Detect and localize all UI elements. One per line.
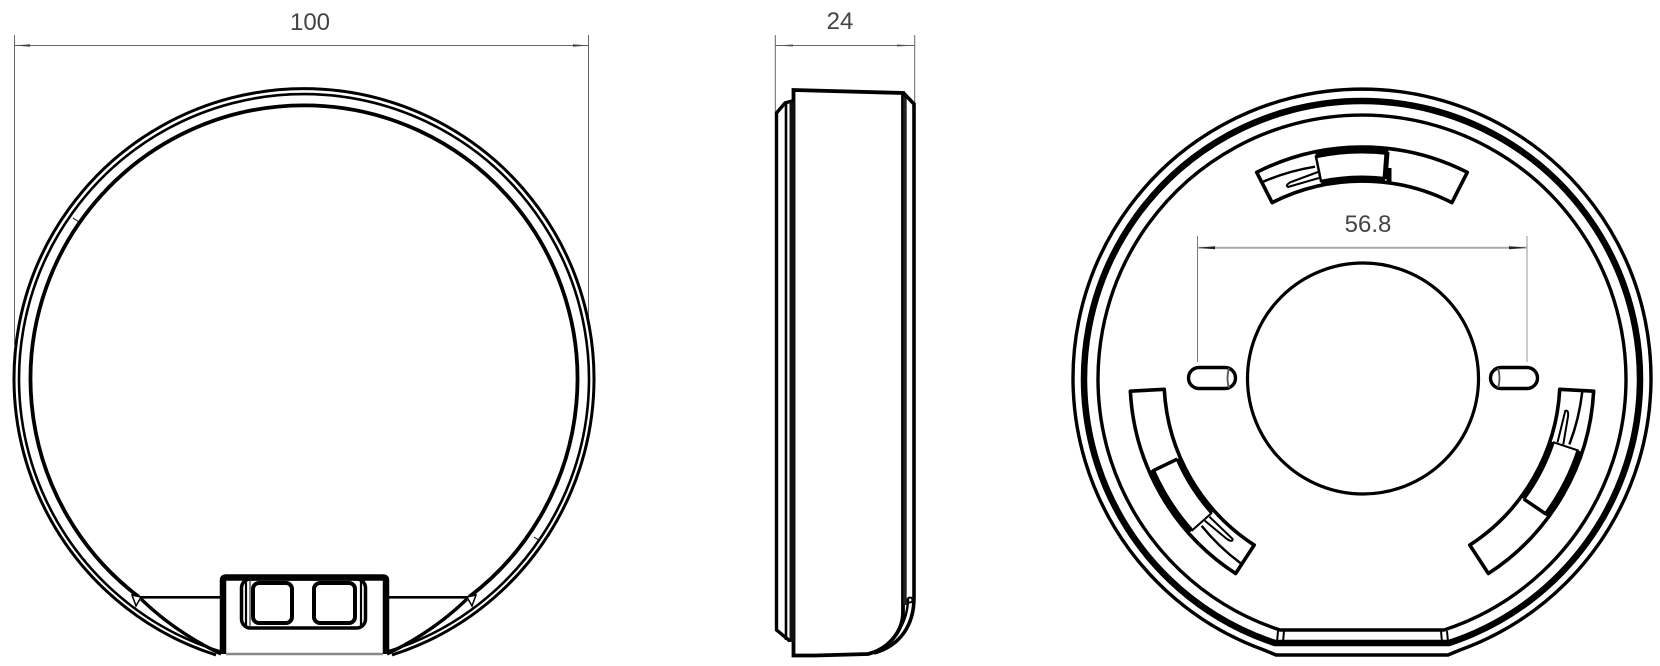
middle ring: [19, 94, 589, 652]
left horizontal edge: [137, 596, 221, 599]
left sensor button: [253, 583, 292, 623]
dimension: depth 24: 24: [827, 8, 853, 35]
sensor housing: [223, 578, 386, 654]
left lower diagonal edge: [141, 599, 221, 654]
right sensor button: [314, 583, 355, 623]
sensor window: [242, 579, 366, 628]
outer ring: [1073, 89, 1651, 655]
right clip: [1462, 376, 1616, 586]
dimension: depth 24: [775, 8, 915, 113]
dimension: width 100: 100: [290, 9, 330, 36]
dimension: slot spacing 56.8: 56.8: [1345, 211, 1391, 238]
left joint mark: [132, 595, 141, 606]
left clip: [1108, 376, 1262, 586]
flange band: [785, 103, 787, 640]
front view of device: [14, 9, 594, 655]
rear flange: [776, 101, 792, 641]
right joint mark: [467, 595, 476, 606]
right bottom tick: [1441, 631, 1448, 642]
right horizontal edge: [389, 596, 473, 599]
inner ring: [1098, 115, 1626, 630]
body right band: [903, 94, 907, 605]
outer ring: [14, 89, 594, 655]
left mounting slot: [1188, 368, 1236, 388]
corner notch: [908, 598, 912, 602]
left upper ring tick: [73, 218, 79, 222]
dimension: slot spacing 56.8: [1198, 211, 1527, 362]
central hole: [1248, 263, 1478, 494]
rounded corner inner edge: [878, 598, 908, 650]
front cover edge: [874, 93, 914, 653]
main body: [794, 90, 903, 656]
inner ring: [31, 105, 578, 597]
body left thick edge: [790, 102, 796, 642]
right lower ring tick: [534, 537, 540, 541]
right lower diagonal edge: [387, 599, 467, 654]
top clip: [1257, 147, 1467, 203]
rear view of device: [1073, 89, 1651, 655]
side view of device: [775, 8, 915, 656]
left bottom tick: [1277, 631, 1284, 642]
right mounting slot: [1490, 368, 1538, 388]
thick middle ring: [1084, 101, 1640, 643]
